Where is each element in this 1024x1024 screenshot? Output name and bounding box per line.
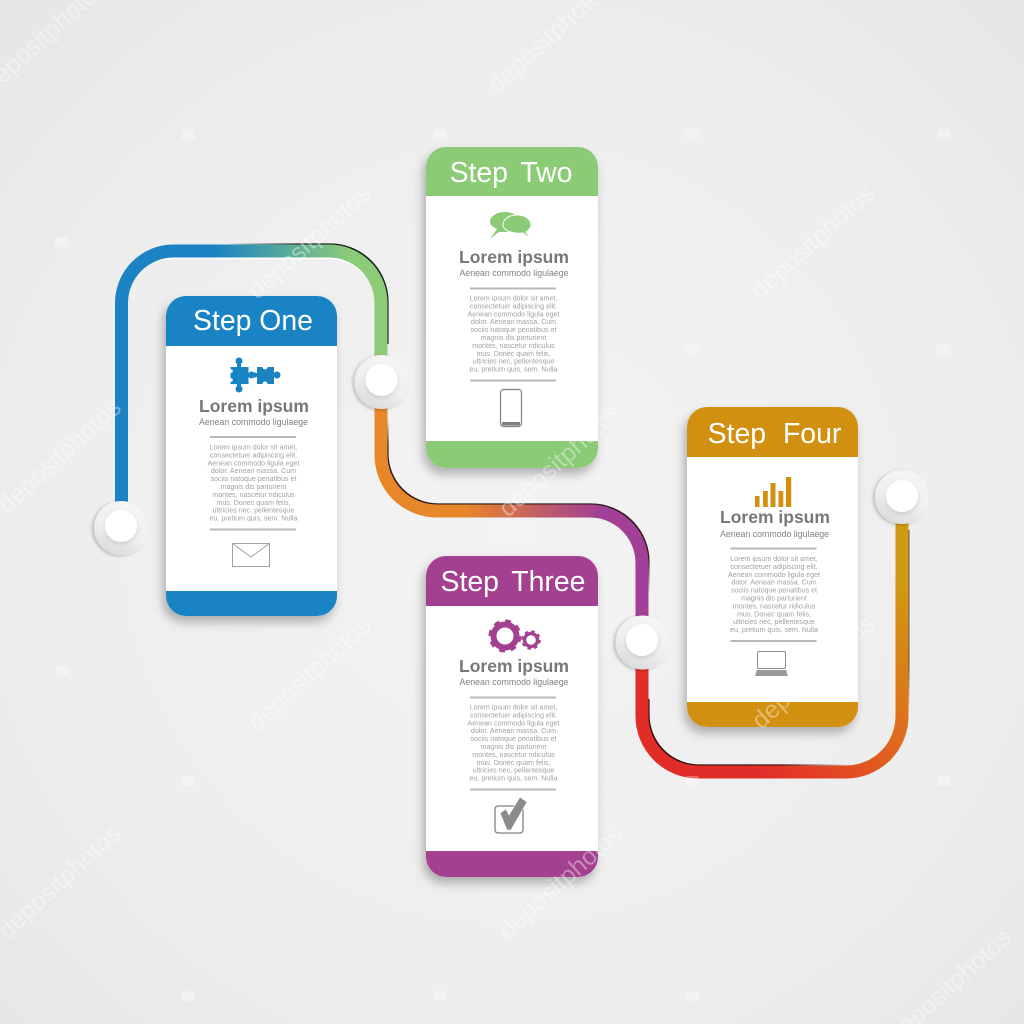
node: between step one and two — [354, 355, 408, 409]
watermark: depositphotos — [242, 612, 377, 737]
panel: step two: Aenean commodo ligulaege — [459, 268, 569, 278]
panel: step three: consectetuer adipiscing elit. — [470, 711, 557, 719]
panel: step one: sociis natoque penatibus et — [211, 475, 297, 483]
panel: step four: sociis natoque penatibus et — [731, 587, 817, 595]
panel: step three: Step Three — [441, 566, 585, 598]
node: start of line — [94, 501, 148, 555]
panel: step three — [426, 556, 598, 877]
panel: step three: Aenean commodo ligula eget — [468, 719, 559, 727]
panel: step two: Step Two — [450, 157, 572, 189]
panel: step one — [166, 296, 337, 616]
panel: step four: montes, nascetur ridiculus — [733, 602, 816, 610]
node: end of line — [875, 470, 929, 524]
panel: step one: Aenean commodo ligula eget — [208, 459, 299, 467]
panel: step two: dolor. Aenean massa. Cum — [471, 318, 556, 326]
panel: step four — [687, 407, 858, 727]
panel: step four: Lorem ipsum dolor sit amet, — [730, 555, 818, 563]
icon: puzzle pieces — [229, 358, 280, 392]
icon: laptop — [755, 652, 788, 676]
icon: envelope — [232, 544, 270, 566]
panel: step three: eu, pretium quis, sem. Nulla — [470, 775, 558, 783]
panel: step two: Aenean commodo ligula eget — [468, 310, 559, 318]
watermark: depositphotos — [745, 180, 880, 305]
connector line: step two to step three — [381, 400, 643, 620]
icon: smartphone — [500, 390, 522, 426]
panel: step two: ultricies nec, pellentesque — [473, 358, 554, 366]
panel: step one: consectetuer adipiscing elit. — [210, 451, 297, 459]
panel: step three: ultricies nec, pellentesque — [473, 767, 554, 775]
panel: step two: montes, nascetur ridiculus — [472, 342, 555, 350]
panel: step four: Aenean commodo ligulaege — [720, 529, 829, 539]
icon: checkbox — [495, 797, 527, 833]
panel: step three: dolor. Aenean massa. Cum — [471, 727, 556, 735]
panel: step four: dolor. Aenean massa. Cum — [731, 579, 817, 587]
panel: step two — [426, 147, 598, 468]
panel: step two: eu, pretium quis, sem. Nulla — [470, 366, 558, 374]
watermark: depositphotos — [746, 610, 881, 735]
panel: step three: Aenean commodo ligulaege — [459, 677, 569, 687]
panel: step four: eu, pretium quis, sem. Nulla — [730, 626, 818, 634]
panel: step one: Aenean commodo ligulaege — [199, 417, 308, 427]
panel: step three: montes, nascetur ridiculus — [472, 751, 555, 759]
watermark: depositphotos — [242, 180, 377, 305]
panel: step one: Lorem ipsum dolor sit amet, — [210, 444, 297, 452]
panel: step three: sociis natoque penatibus et — [471, 735, 557, 743]
watermark: depositphotos — [493, 398, 628, 523]
panel: step two: Lorem ipsum dolor sit amet, — [470, 294, 557, 302]
panel: step two: consectetuer adipiscing elit. — [470, 302, 557, 310]
panel: step one: montes, nascetur ridiculus — [212, 491, 295, 499]
panel: step one: magnis dis parturient — [221, 483, 286, 491]
connector line: step one to step two — [122, 250, 382, 505]
panel: step one: eu, pretium quis, sem. Nulla — [210, 515, 298, 523]
icon: bar chart — [755, 477, 791, 507]
node: between step three and four — [616, 616, 670, 670]
panel: step one: ultricies nec, pellentesque — [213, 507, 294, 515]
panel: step two: mus. Donec quam felis, — [476, 350, 551, 358]
panel: step two: sociis natoque penatibus et — [471, 326, 557, 334]
panel: step one: Lorem ipsum — [199, 396, 309, 416]
panel: step three: mus. Donec quam felis, — [476, 759, 551, 767]
panel: step one: Step One — [193, 305, 313, 337]
panel: step four: Step Four — [708, 418, 841, 450]
connector line: step three to step four — [642, 515, 903, 772]
panel: step four: ultricies nec, pellentesque — [733, 618, 815, 626]
panel: step four: magnis dis parturient — [741, 594, 807, 602]
panel: step three: magnis dis parturient — [481, 743, 546, 751]
panel: step four: mus. Donec quam felis, — [737, 610, 811, 618]
panel: step two: magnis dis parturient — [481, 334, 546, 342]
panel: step four: Lorem ipsum — [720, 507, 830, 527]
panel: step three: Lorem ipsum dolor sit amet, — [470, 704, 557, 712]
panel: step one: mus. Donec quam felis, — [216, 499, 291, 507]
icon: speech bubbles — [490, 212, 531, 239]
icon: gears — [490, 622, 540, 650]
panel: step three: Lorem ipsum — [459, 656, 569, 676]
panel: step one: dolor. Aenean massa. Cum — [211, 467, 296, 475]
watermark: depositphotos — [493, 820, 628, 945]
panel: step two: Lorem ipsum — [459, 247, 569, 267]
panel: step four: Aenean commodo ligula eget — [728, 571, 820, 579]
panel: step four: consectetuer adipiscing elit. — [730, 563, 818, 571]
